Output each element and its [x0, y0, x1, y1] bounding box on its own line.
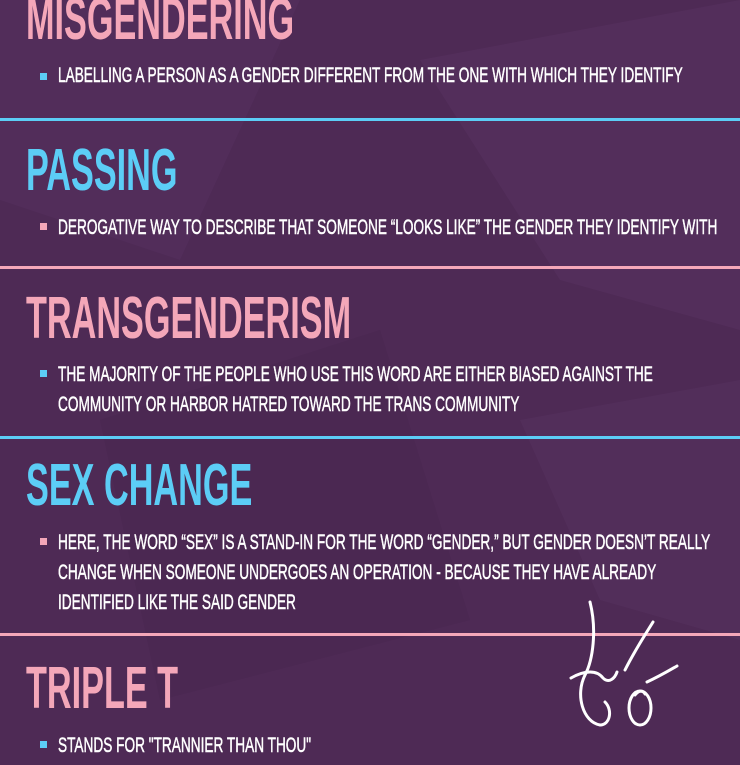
bullet text: triple t: STANDS FOR "TRANNIER THAN THOU"	[58, 734, 311, 757]
bullet text: sex change	[58, 531, 710, 614]
bullet text: transgenderism	[58, 363, 653, 416]
heading: sex change: SEX CHANGE	[26, 452, 252, 518]
bullet text: transgenderism: COMMUNITY OR HARBOR HATRED TOWARD THE TRANS COMMUNITY	[58, 393, 519, 416]
bullet text: misgendering: LABELLING A PERSON AS A GENDER DIFFERENT FROM THE ONE WITH WHICH THEY IDENTIFY	[58, 64, 683, 87]
bullet text: sex change: HERE, THE WORD “SEX” IS A STAND-IN FOR THE WORD “GENDER,” BUT GENDER DOESN’T REALLY	[58, 531, 710, 554]
heading: passing: PASSING	[26, 137, 177, 203]
bullet text: transgenderism: THE MAJORITY OF THE PEOPLE WHO USE THIS WORD ARE EITHER BIASED AGAINST THE	[58, 363, 653, 386]
bullet text: passing: DEROGATIVE WAY TO DESCRIBE THAT SOMEONE “LOOKS LIKE” THE GENDER THEY IDENTIFY WITH	[58, 216, 717, 239]
bullet text: sex change: CHANGE WHEN SOMEONE UNDERGOES AN OPERATION - BECAUSE THEY HAVE ALREADY	[58, 561, 656, 584]
bullet text: sex change: IDENTIFIED LIKE THE SAID GENDER	[58, 591, 296, 614]
heading: triple t: TRIPLE T	[26, 655, 178, 721]
heading: transgenderism: TRANSGENDERISM	[26, 285, 351, 351]
icon: logo	[569, 600, 679, 726]
